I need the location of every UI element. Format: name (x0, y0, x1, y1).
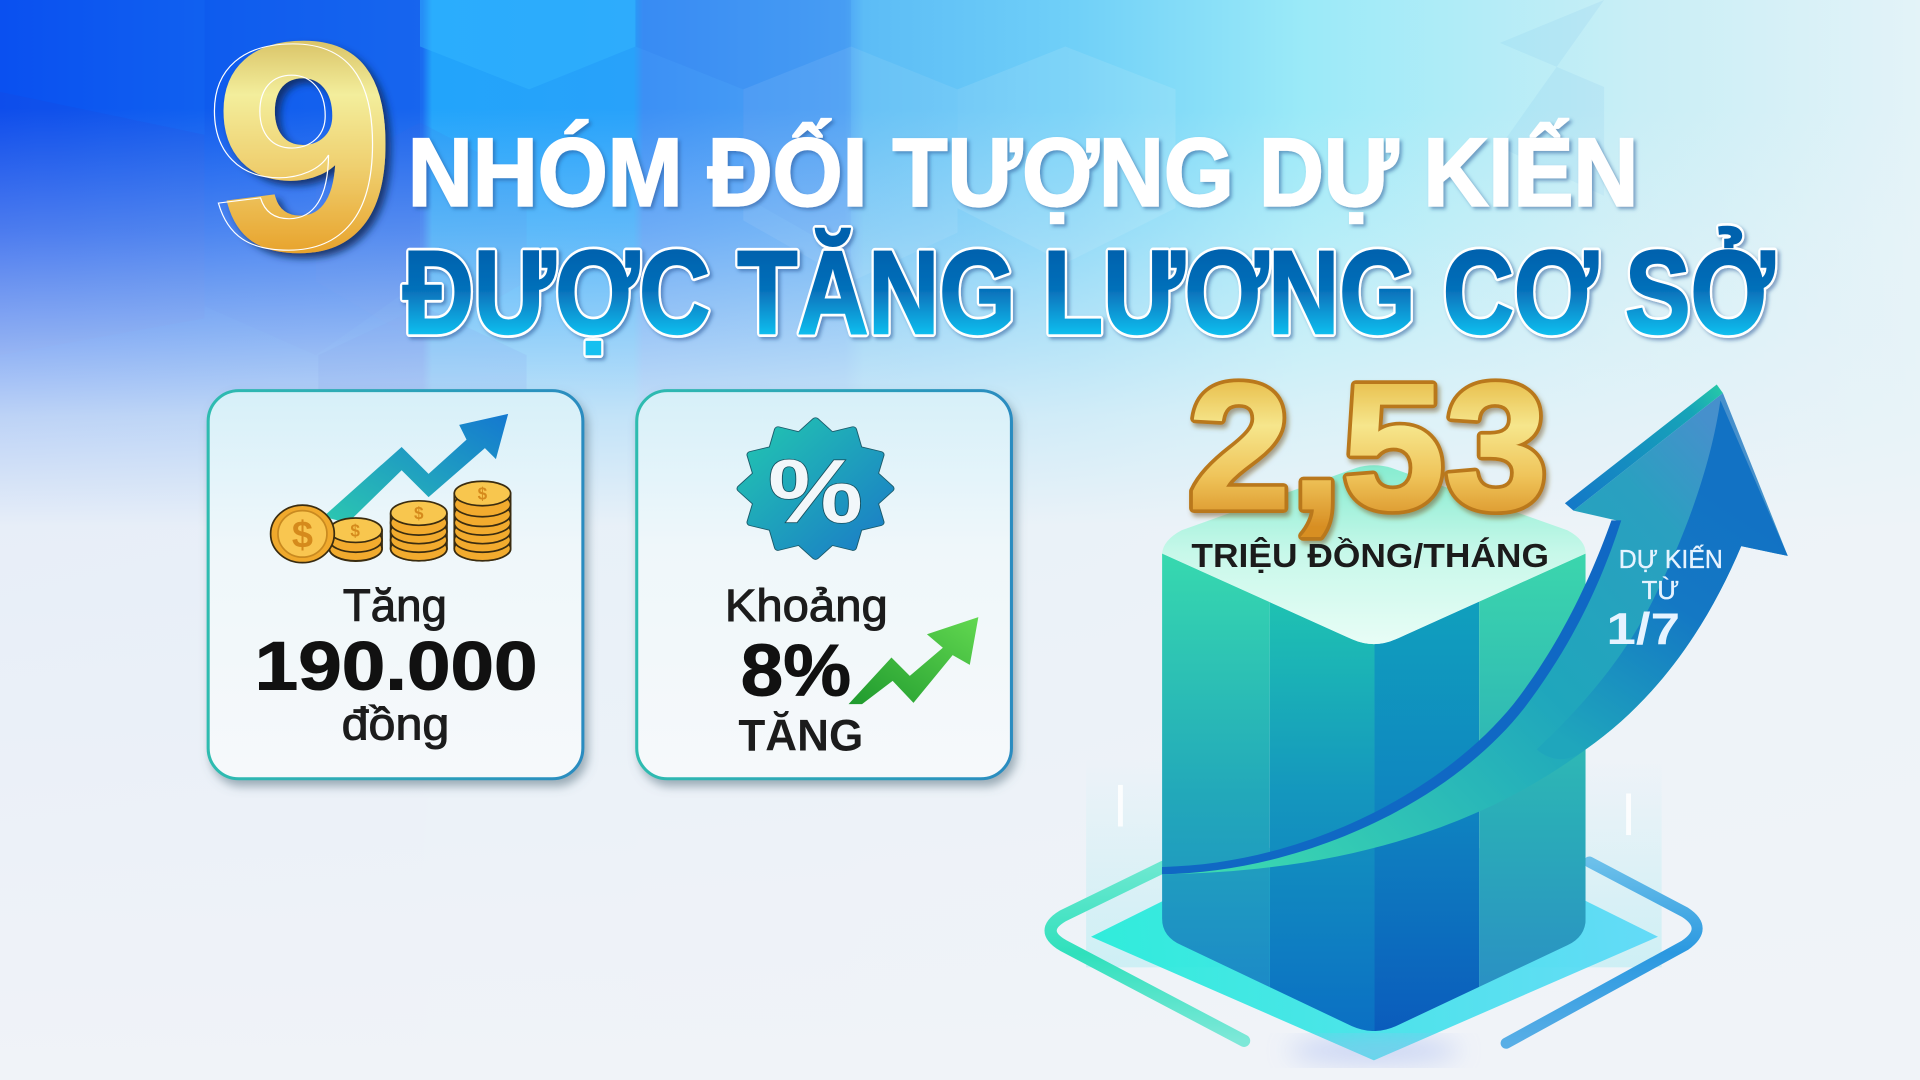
icon: percent badge (741, 421, 890, 556)
card background (208, 391, 583, 779)
text: dự kiến từ: DỰ KIẾN (1619, 545, 1723, 574)
panel: tăng 190.000 đồng: $ (292, 514, 313, 556)
sparkles (1118, 785, 1631, 835)
text: 1/7: 1/7 (1607, 605, 1680, 654)
panel: tăng 190.000 đồng: $ (350, 520, 360, 540)
panel: tăng 190.000 đồng: $ (478, 484, 488, 504)
icon: rising arrow (323, 414, 508, 523)
panel: tăng 190.000 đồng: $ (414, 503, 424, 523)
icon: coin stacks (271, 481, 511, 563)
icon: green arrow (849, 617, 978, 704)
text: 8%: 8% (741, 629, 851, 712)
platform base (1051, 796, 1697, 1063)
text: triệu đồng/tháng: TRIỆU ĐỒNG/THÁNG (1191, 537, 1549, 575)
text: tăng: Tăng (343, 580, 447, 631)
glow behind platform (1086, 759, 1662, 967)
panel: tăng 190.000 đồng (208, 391, 583, 779)
column (1162, 465, 1586, 1053)
value 2,53: 2,53 (1188, 346, 1548, 546)
column top face (1162, 465, 1586, 644)
icon: percent badge: % (768, 442, 863, 542)
value 2,53: 2,53 (1188, 346, 1548, 546)
panel: khoảng 8% tăng (637, 391, 1011, 779)
text: đồng: đồng (342, 699, 449, 750)
card background (637, 391, 1011, 779)
text: tăng: TĂNG (738, 711, 863, 761)
growth arrow (1162, 384, 1788, 874)
text: khoảng: Khoảng (725, 580, 888, 631)
text: 190.000: 190.000 (255, 627, 538, 704)
title line 1: NHÓM ĐỐI TƯỢNG DỰ KIẾN (408, 119, 1638, 227)
text: từ: TỪ (1642, 576, 1679, 605)
